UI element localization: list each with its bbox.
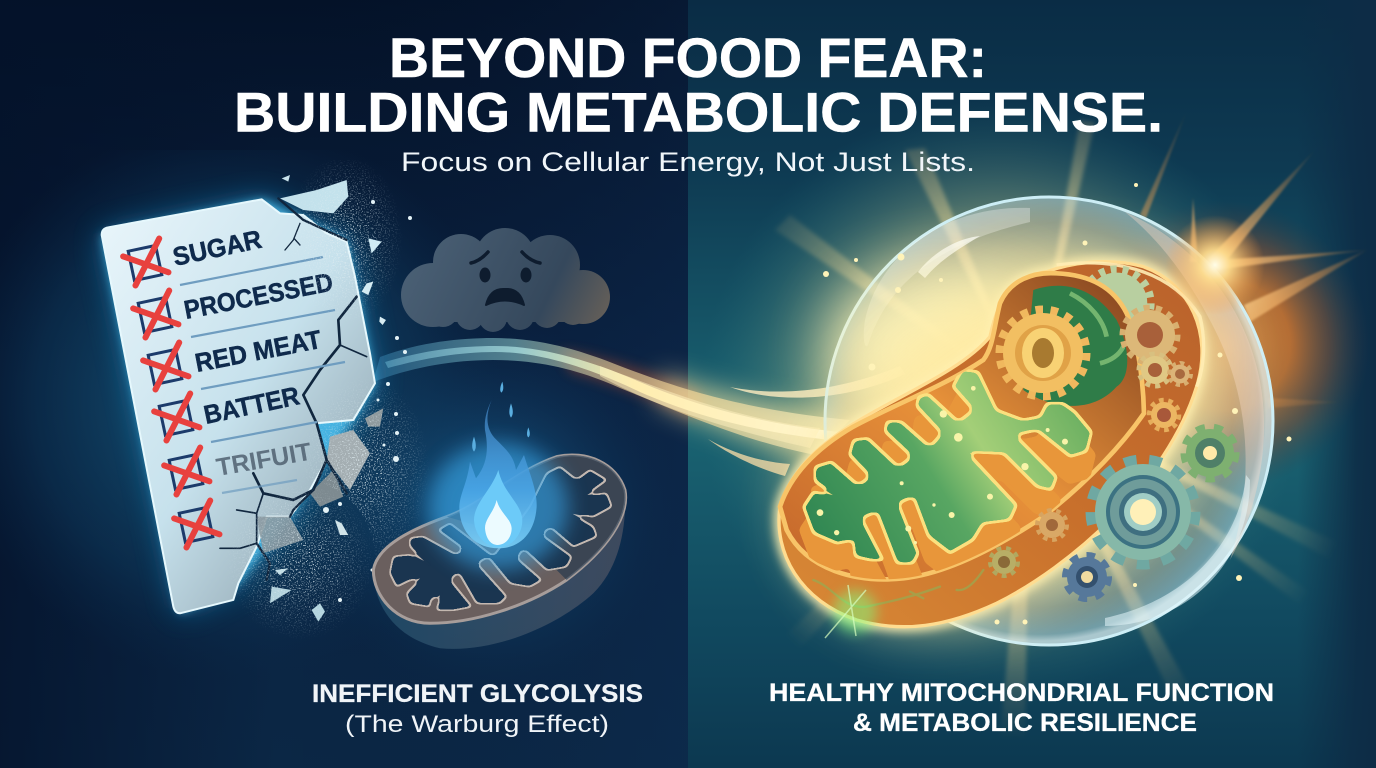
list item text bbox=[170, 224, 335, 482]
dust particles bbox=[232, 160, 427, 636]
mitochondrion body bbox=[779, 262, 1204, 627]
protective bubble bbox=[825, 197, 1273, 645]
cracks bbox=[220, 198, 367, 580]
title: BUILDING METABOLIC DEFENSE. bbox=[234, 80, 1163, 144]
bright star flare bbox=[1165, 215, 1265, 315]
steel gear large bbox=[1091, 460, 1195, 564]
cut face bbox=[780, 273, 1144, 579]
checkboxes with red crosses bbox=[121, 238, 221, 549]
background: teal right panel with radiating light bbox=[688, 0, 1376, 768]
paper glow bbox=[102, 199, 375, 613]
flow ribbon: energy stream from list to healthy mitochondrion bbox=[373, 338, 905, 476]
cloud body bbox=[401, 228, 610, 332]
green flare bbox=[825, 585, 877, 638]
left caption: (The Warburg Effect) bbox=[345, 711, 609, 738]
floating light specks bbox=[823, 183, 1292, 624]
background: dark left panel bbox=[0, 0, 688, 768]
slate gear small bbox=[1065, 555, 1109, 599]
crumbling food list bbox=[88, 160, 427, 636]
list item text: PROCESSED bbox=[181, 267, 335, 325]
paper sheet bbox=[102, 175, 386, 622]
warm glow behind mitochondrion bbox=[742, 192, 1278, 688]
list item text: RED MEAT bbox=[192, 324, 324, 378]
blue flame bbox=[428, 382, 568, 570]
main gold gear bbox=[1000, 310, 1086, 396]
list item text: BATTER bbox=[201, 380, 302, 430]
list rule lines bbox=[180, 257, 345, 493]
pale gear behind cut face bbox=[1083, 270, 1150, 337]
title bbox=[234, 26, 1163, 144]
worried storm cloud bbox=[401, 228, 610, 332]
left caption: INEFFICIENT GLYCOLYSIS bbox=[312, 680, 643, 708]
dim mitochondrion with blue flame bbox=[373, 382, 626, 649]
subtitle: Focus on Cellular Energy, Not Just Lists. bbox=[401, 147, 975, 177]
right caption: & METABOLIC RESILIENCE bbox=[853, 709, 1197, 737]
list item text: SUGAR bbox=[170, 224, 264, 272]
dim mitochondrion bbox=[373, 455, 626, 649]
healthy mitochondrion in protective bubble bbox=[742, 183, 1292, 688]
vines in lower body bbox=[813, 570, 983, 607]
right caption bbox=[769, 679, 1274, 737]
right caption: HEALTHY MITOCHONDRIAL FUNCTION bbox=[769, 679, 1274, 707]
background gears inside mitochondrion bbox=[990, 308, 1191, 576]
cloud face bbox=[471, 252, 540, 305]
list item text: TRIFUIT bbox=[214, 438, 314, 482]
title: BEYOND FOOD FEAR: bbox=[389, 26, 987, 89]
green gear small bbox=[1184, 427, 1236, 479]
left caption bbox=[312, 680, 643, 738]
